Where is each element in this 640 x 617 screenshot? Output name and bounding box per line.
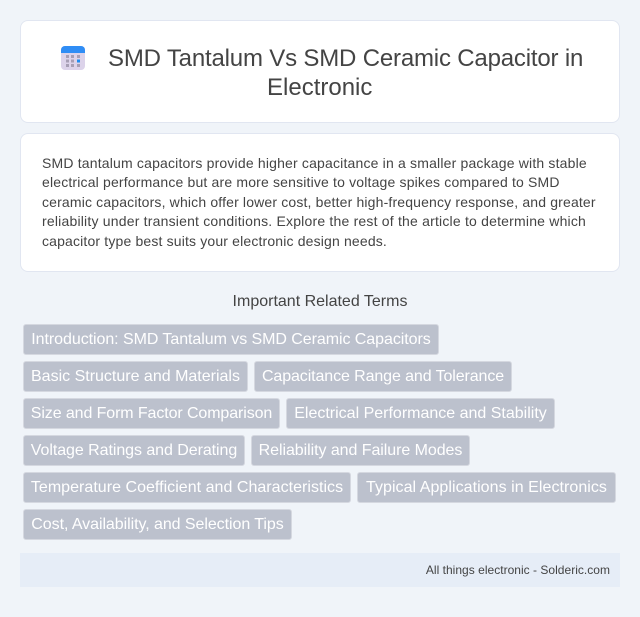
summary text: capacitor type best suits your electronic design needs.: [42, 233, 387, 249]
icon: calendar: [61, 46, 85, 70]
tag: size and form factor: [23, 398, 280, 429]
tag: introduction: Introduction: SMD Tantalum vs SMD Ceramic Capacitors: [31, 331, 431, 348]
tag: temperature coefficient: [23, 472, 351, 503]
title: SMD Tantalum Vs SMD Ceramic Capacitor in: [108, 45, 583, 72]
panel: title card: [20, 20, 620, 123]
tag: cost and availability: Cost, Availability, and Selection Tips: [31, 516, 284, 533]
tag: typical applications: Typical Applications in Electronics: [366, 479, 607, 496]
tag: temperature coefficient: Temperature Coefficient and Characteristics: [31, 479, 343, 496]
tag: electrical performance: Electrical Performance and Stability: [294, 405, 547, 422]
summary text: reliability under transient conditions. Explore the rest of the article to determine which: [42, 213, 586, 229]
summary text: SMD tantalum capacitors provide higher capacitance in a smaller package with stable: [42, 155, 587, 171]
tag: voltage ratings: Voltage Ratings and Derating: [31, 442, 237, 459]
footer text: All things electronic - Solderic.com: [426, 563, 610, 577]
tag: size and form factor: Size and Form Factor Comparison: [31, 405, 272, 422]
summary text: electrical performance but are more sensitive to voltage spikes compared to SMD: [42, 174, 560, 190]
tag: introduction: [23, 324, 439, 355]
tag: basic structure: [23, 361, 248, 392]
tag: reliability: [251, 435, 470, 466]
summary text: [42, 155, 596, 249]
panel: related terms tags: [23, 324, 616, 540]
title line 2: Electronic: [267, 74, 372, 101]
tag: basic structure: Basic Structure and Materials: [31, 368, 240, 385]
panel: summary card: [20, 133, 620, 272]
tag: cost and availability: [23, 509, 292, 540]
tag: reliability: Reliability and Failure Modes: [259, 442, 462, 459]
tag: typical applications: [357, 472, 616, 503]
tag: capacitance range: Capacitance Range and Tolerance: [262, 368, 504, 385]
summary text: ceramic capacitors, which offer lower cost, better high-frequency response, and greater: [42, 194, 596, 210]
tag: electrical performance: [286, 398, 555, 429]
tag: capacitance range: [254, 361, 512, 392]
heading: important related terms: Important Related Terms: [233, 293, 407, 310]
footer: [20, 553, 620, 587]
tag: voltage ratings: [23, 435, 245, 466]
